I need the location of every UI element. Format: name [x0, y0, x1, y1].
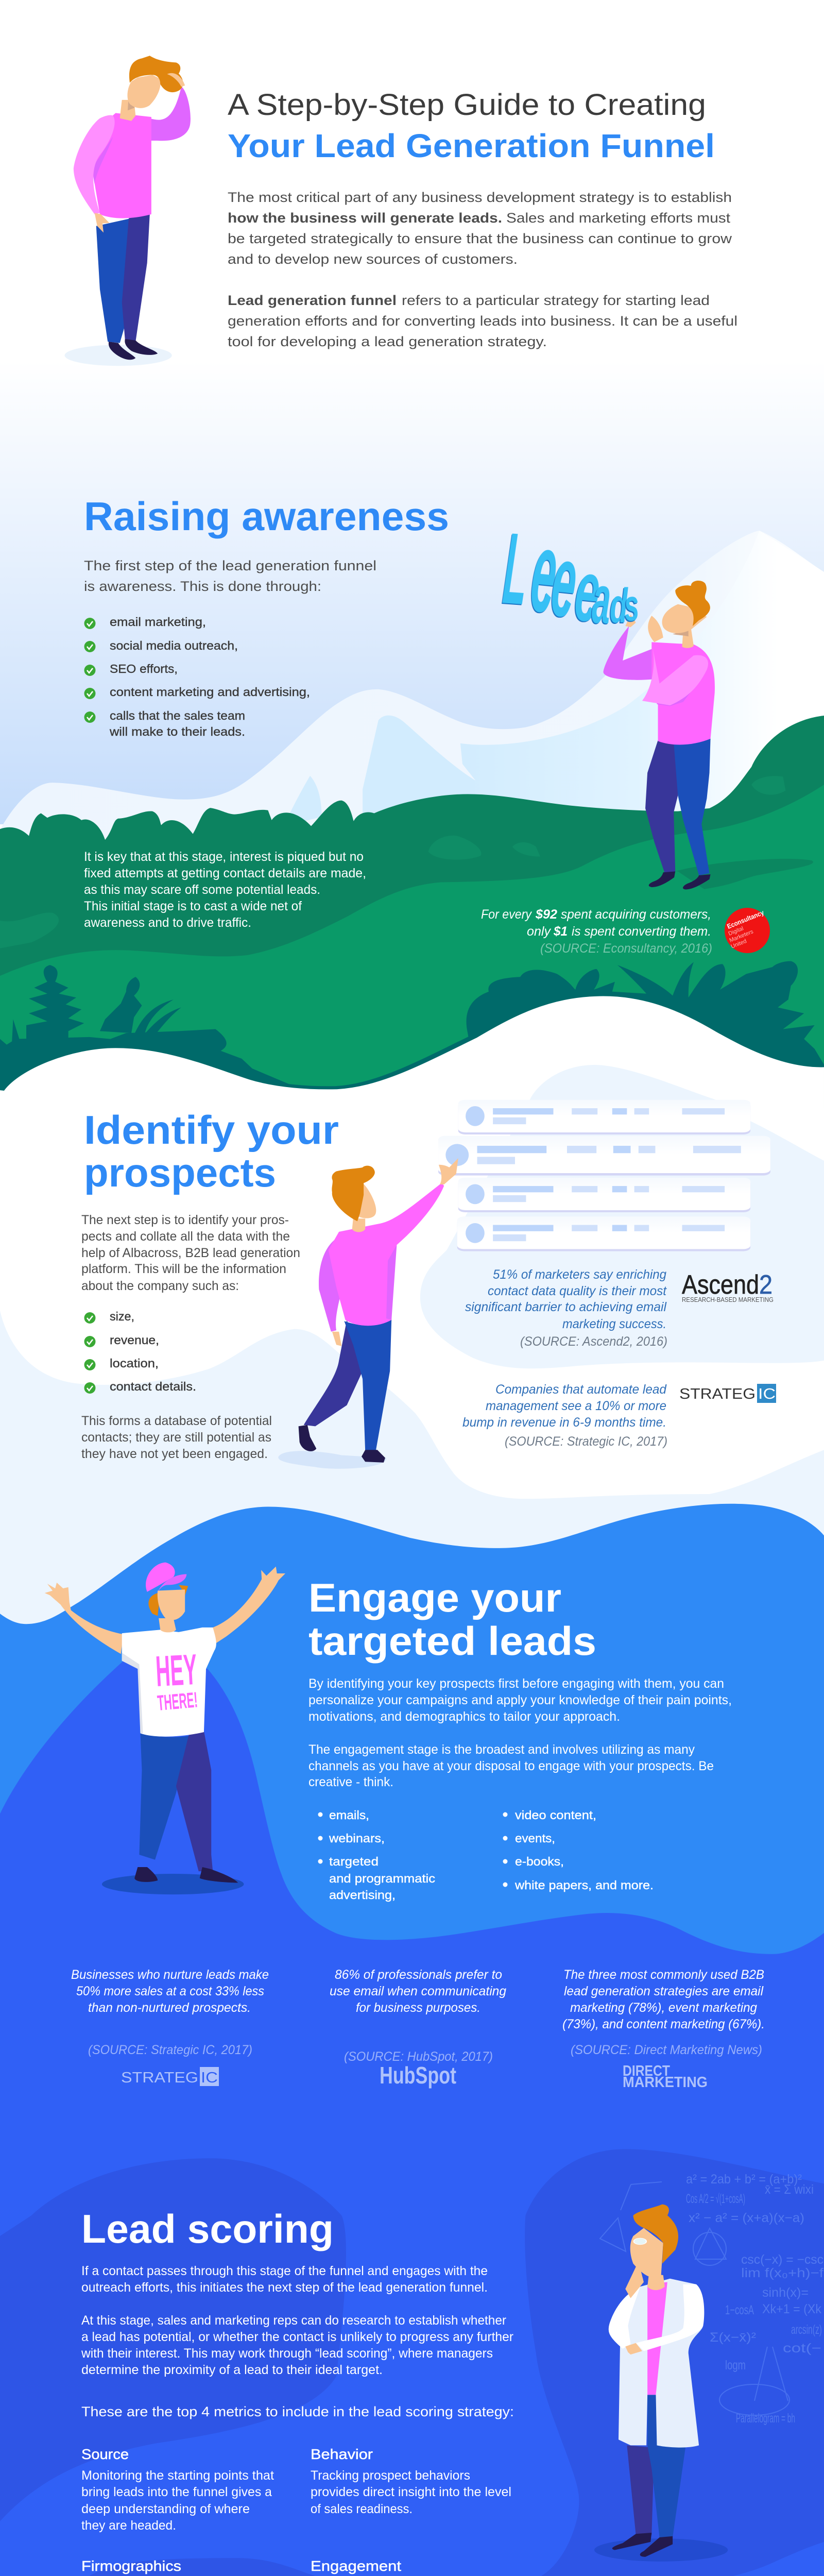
lead scoring paragraph 1: If a contact passes through this stage of the funnel and engages with the — [81, 2264, 488, 2278]
bullet list: engagement channels: white papers, and more. — [514, 1878, 654, 1892]
section background: sky gradient — [0, 361, 824, 824]
identify paragraph: The next step is to identify your pros- — [81, 1213, 289, 1227]
engage paragraph 2: channels as you have at your disposal to engage with your prospects. Be — [308, 1759, 714, 1773]
statistic: Econsultancy: spent acquiring customers, — [561, 907, 711, 922]
awareness note on green: as this may scare off some potential leads. — [84, 883, 320, 897]
statistic: Ascend2: (SOURCE: Ascend2, 2016) — [520, 1334, 667, 1349]
decoration: chalkboard formulas: csc(−x) = −csc — [741, 2252, 823, 2267]
bullet list: engagement channels: events, — [515, 1832, 555, 1845]
raising awareness intro: is awareness. This is done through: — [84, 579, 321, 594]
statistic: lead nurturing: 50% more sales at a cost 33% less — [76, 1984, 264, 1998]
statistic: Ascend2: 51% of marketers say enriching — [493, 1267, 666, 1282]
intro paragraph 1: Sales and marketing efforts must — [506, 210, 731, 226]
illustration: man shouting — [603, 581, 715, 890]
lead scoring paragraph 2: with their interest. This may work through “lead scoring”, where managers — [81, 2346, 493, 2361]
bullet list: engagement channels: targeted — [329, 1855, 379, 1868]
awareness note on green: awareness and to drive traffic. — [84, 916, 251, 930]
shouted word: Leeeads: a — [590, 562, 613, 638]
white hills edge — [0, 994, 824, 1128]
statistic: Strategic IC automation: (SOURCE: Strategic IC, 2017) — [505, 1434, 667, 1449]
logo: Econsultancy: Marketers — [729, 928, 754, 944]
awareness note on green: This initial stage is to cast a wide net of — [84, 899, 302, 913]
logo: Strategic IC: IC — [201, 2070, 218, 2086]
metric: source: bring leads into the funnel gives a — [81, 2485, 272, 2499]
statistic: Econsultancy: (SOURCE: Econsultancy, 2016) — [540, 941, 712, 956]
logo: Econsultancy: Digital — [728, 925, 744, 937]
intro paragraph 1: and to develop new sources of customers. — [228, 251, 518, 267]
card 1 — [458, 1100, 750, 1134]
checklist: channels: content marketing and advertising, — [110, 685, 310, 699]
t-shirt slogan — [154, 1645, 198, 1715]
shouted word: Leeeads: e — [526, 506, 563, 637]
statistic: B2B strategies: lead generation strategies are email — [564, 1984, 764, 1998]
identify paragraph: help of Albacross, B2B lead generation — [81, 1246, 300, 1260]
lead scoring paragraph 1 — [81, 2264, 488, 2295]
logo: Strategic IC — [679, 1384, 776, 1403]
metric: engagement: Engagement — [311, 2558, 401, 2574]
decoration: chalkboard formulas: lim f(x₀+h)−f — [741, 2266, 823, 2280]
logo: Strategic IC — [121, 2067, 219, 2086]
intro paragraph 2: generation efforts and for converting leads into business. It can be a useful — [228, 313, 737, 329]
t-shirt slogan: THERE! — [157, 1687, 198, 1715]
section background: identify blobs — [0, 1065, 824, 1713]
title: Your Lead Generation Funnel — [228, 127, 715, 164]
statistic: lead nurturing: (SOURCE: Strategic IC, 2017) — [88, 2043, 252, 2057]
decoration: chalkboard formulas: Xk+1 = (Xk — [762, 2302, 821, 2316]
checklist: channels: calls that the sales team — [110, 709, 245, 722]
logo: Direct Marketing News: DIRECT — [623, 2063, 670, 2079]
statistic: email preference — [330, 1968, 506, 2089]
decoration: chalkboard formulas: x̄ = Σ wixi — [765, 2182, 814, 2197]
raising awareness intro — [84, 558, 376, 594]
statistic: lead nurturing: Businesses who nurture leads make — [71, 1968, 269, 1982]
engage paragraph 1: motivations, and demographics to tailor your approach. — [308, 1709, 620, 1724]
decoration: chalkboard formulas: x² − a² = (x+a)(x−a) — [689, 2211, 804, 2225]
metric: source — [81, 2446, 274, 2533]
identify paragraph: platform. This will be the information — [81, 1262, 286, 1276]
illustration: man with raised arms — [45, 1563, 285, 1894]
statistic: Ascend2: marketing success. — [562, 1317, 666, 1331]
decoration: chalkboard formulas: Cos A/2 = √(1+cosA) — [686, 2192, 745, 2206]
shouted word: Leeeads: e — [547, 524, 582, 639]
statistic: Econsultancy: only — [527, 924, 551, 939]
awareness note on green: It is key that at this stage, interest is piqued but no — [84, 850, 364, 864]
metrics intro: These are the top 4 metrics to include in the lead scoring strategy: — [81, 2404, 514, 2419]
bullet list: engagement channels: emails, — [329, 1808, 369, 1822]
decoration: chalkboard formulas: Σ(x−x̄)² — [710, 2330, 756, 2345]
decoration: chalkboard formulas: logm — [725, 2358, 746, 2372]
engage paragraph 2 — [308, 1742, 714, 1789]
logo: Strategic IC: STRATEG — [679, 1386, 756, 1402]
statistic: B2B strategies: (73%), and content marketing (67%). — [562, 2017, 765, 2031]
statistic: email preference: 86% of professionals prefer to — [335, 1968, 502, 1982]
intro paragraph 1: be targeted strategically to ensure that the business can continue to grow — [228, 231, 732, 246]
metric: behavior — [311, 2446, 511, 2516]
decoration: chalkboard formulas: sinh(x)= — [762, 2285, 809, 2300]
checklist: company data — [84, 1310, 196, 1394]
metric: behavior: Tracking prospect behaviors — [311, 2468, 470, 2483]
statistic: B2B strategies: marketing (78%), event marketing — [570, 2001, 757, 2015]
panel: prospect list cards — [438, 1100, 770, 1251]
card 2 highlighted — [438, 1136, 770, 1176]
card 3 — [458, 1178, 750, 1212]
plants right — [467, 961, 824, 1064]
infographic canvas: HEY — [154, 1645, 198, 1696]
shouted word: Leeeads — [500, 506, 641, 640]
shouted word: Leeeads: d — [610, 578, 628, 633]
decoration: chalkboard formulas: a² = 2ab + b² = (a+b)² — [686, 2172, 802, 2187]
decoration: chalkboard formulas: cot(− — [783, 2341, 821, 2355]
identify closing paragraph: they have not yet been engaged. — [81, 1447, 268, 1461]
bullet list: engagement channels: video content, — [515, 1808, 596, 1822]
checklist: channels: SEO efforts, — [110, 662, 178, 675]
awareness note on green: fixed attempts at getting contact details are made, — [84, 866, 366, 880]
shouted word: Leeeads: L — [500, 511, 531, 626]
statistic: Econsultancy: For every — [481, 907, 532, 922]
metric: source: deep understanding of where — [81, 2502, 250, 2516]
statistic: Econsultancy: $92 — [535, 907, 557, 922]
heading: identify your prospects: prospects — [84, 1150, 276, 1195]
lead scoring paragraph 2: a lead has potential, or whether the contact is unlikely to progress any further — [81, 2330, 513, 2344]
illustration: man pointing at list — [278, 1158, 458, 1469]
lead scoring paragraph 2: determine the proximity of a lead to their ideal target. — [81, 2363, 383, 2377]
panel: dark blue shapes — [0, 2149, 824, 2576]
intro paragraph 2: refers to a particular strategy for starting lead — [402, 293, 710, 308]
statistic: Econsultancy: $1 — [553, 924, 568, 939]
intro paragraph 1: how the business will generate leads. — [228, 210, 502, 226]
identify paragraph — [81, 1213, 300, 1293]
checklist: company data: contact details. — [110, 1380, 196, 1393]
statistic: Strategic IC automation: bump in revenue in 6-9 months time. — [462, 1415, 666, 1430]
intro paragraph 2: tool for developing a lead generation strategy. — [228, 334, 547, 349]
checklist: company data: location, — [110, 1357, 159, 1370]
checklist: channels: social media outreach, — [110, 639, 238, 652]
engage paragraph 1 — [308, 1676, 732, 1724]
raising awareness intro: The first step of the lead generation funnel — [84, 558, 376, 573]
heading: raising awareness: Raising awareness — [84, 494, 449, 539]
metric: behavior: provides direct insight into the level — [311, 2485, 511, 2499]
logo: HubSpot: HubSpot — [380, 2062, 456, 2089]
identify paragraph: about the company such as: — [81, 1279, 239, 1293]
statistic: Ascend2 — [465, 1267, 667, 1349]
identify closing paragraph — [81, 1414, 272, 1461]
engage paragraph 1: By identifying your key prospects first before engaging with them, you can — [308, 1676, 724, 1691]
checklist: channels: email marketing, — [110, 615, 206, 629]
intro paragraph 2 — [228, 293, 737, 349]
card 4 — [457, 1216, 750, 1251]
identify closing paragraph: contacts; they are still potential as — [81, 1430, 271, 1445]
statistic: Econsultancy — [481, 907, 712, 956]
logo: Direct Marketing News — [623, 2063, 708, 2091]
statistic: Econsultancy: is spent converting them. — [572, 924, 711, 939]
statistic: Ascend2: contact data quality is their most — [488, 1284, 667, 1298]
statistic: email preference: use email when communicating — [330, 1984, 506, 1998]
checklist: channels: will make to their leads. — [109, 725, 245, 738]
metric: behavior: of sales readiness. — [311, 2502, 413, 2516]
heading: engage your targeted leads — [308, 1575, 596, 1664]
metric: behavior: Behavior — [311, 2446, 373, 2462]
statistic: lead nurturing — [71, 1968, 269, 2086]
mountains — [0, 531, 824, 872]
panel: engage light blue wave — [0, 1504, 824, 1977]
bullet list: engagement channels — [318, 1808, 654, 1902]
decoration: chalkboard formulas — [600, 2172, 823, 2426]
heading: engage your targeted leads: Engage your — [308, 1575, 561, 1620]
intro paragraph 1 — [228, 190, 732, 267]
statistic: lead nurturing: than non-nurtured prospects. — [88, 2001, 251, 2015]
checklist: company data: revenue, — [110, 1333, 159, 1347]
heading: identify your prospects — [84, 1107, 339, 1195]
decoration: chalkboard formulas: 1−cosA — [725, 2303, 754, 2317]
illustration: scientist thinking — [594, 2205, 728, 2562]
heading: identify your prospects: Identify your — [84, 1107, 339, 1153]
statistic: Strategic IC automation: Companies that automate lead — [495, 1382, 667, 1397]
metric: source: Monitoring the starting points that — [81, 2468, 274, 2483]
panel: royal blue background — [0, 1661, 824, 2576]
bullet list: engagement channels: and programmatic — [329, 1872, 435, 1885]
heading: engage your targeted leads: targeted leads — [308, 1618, 596, 1664]
statistic: email preference: (SOURCE: HubSpot, 2017) — [344, 2049, 493, 2064]
logo: Ascend2: RESEARCH-BASED MARKETING — [682, 1296, 774, 1303]
checklist: channels — [84, 615, 310, 738]
lead scoring paragraph 2 — [81, 2313, 513, 2377]
green hills — [0, 716, 824, 1108]
statistic: B2B strategies — [562, 1968, 765, 2091]
heading: lead scoring: Lead scoring — [81, 2206, 334, 2251]
plants left — [0, 965, 294, 1086]
intro paragraph 1: The most critical part of any business development strategy is to establish — [228, 190, 732, 205]
identify closing paragraph: This forms a database of potential — [81, 1414, 272, 1428]
intro paragraph 2: Lead generation funnel — [228, 293, 397, 308]
awareness note on green — [84, 850, 366, 930]
statistic: email preference: for business purposes. — [356, 2001, 480, 2015]
logo: Ascend2: Ascend — [682, 1270, 759, 1300]
bullet list: engagement channels: advertising, — [329, 1888, 396, 1902]
metric: source: they are headed. — [81, 2518, 176, 2533]
engage paragraph 2: The engagement stage is the broadest and involves utilizing as many — [308, 1742, 695, 1757]
statistic: Strategic IC automation — [462, 1382, 667, 1449]
statistic: B2B strategies: (SOURCE: Direct Marketing News) — [571, 2043, 762, 2057]
logo: Strategic IC: IC — [758, 1386, 776, 1402]
metric: source: Source — [81, 2446, 129, 2462]
statistic: Strategic IC automation: management see a 10% or more — [486, 1399, 666, 1413]
identify paragraph: pects and collate all the data with the — [81, 1229, 290, 1244]
metric: firmographics: Firmographics — [81, 2558, 181, 2574]
logo: Direct Marketing News: MARKETING — [623, 2074, 708, 2091]
statistic: Ascend2: significant barrier to achieving email — [465, 1300, 667, 1314]
bullet list: engagement channels: webinars, — [329, 1832, 385, 1845]
logo: Strategic IC: STRATEG — [121, 2070, 198, 2086]
logo: Econsultancy: Econsultancy — [726, 908, 765, 930]
engage paragraph 2: creative - think. — [308, 1775, 393, 1789]
title: A Step-by-Step Guide to Creating — [228, 88, 706, 122]
shouted word: Leeeads: s — [623, 581, 641, 630]
engage paragraph 1: personalize your campaigns and apply your knowledge of their pain points, — [308, 1693, 732, 1707]
logo: Econsultancy: United — [730, 938, 748, 950]
shouted word: Leeeads: e — [571, 542, 605, 640]
bullet list: engagement channels: e-books, — [515, 1855, 564, 1868]
title — [228, 88, 715, 164]
illustration: man scratching head — [65, 56, 191, 366]
statistic: B2B strategies: The three most commonly used B2B — [563, 1968, 764, 1982]
panel: royal blue highlight blobs — [0, 2542, 824, 2576]
logo: Econsultancy — [725, 908, 770, 953]
logo: Ascend2: 2 — [759, 1270, 772, 1300]
lead scoring paragraph 2: At this stage, sales and marketing reps can do research to establish whether — [81, 2313, 506, 2328]
lead scoring paragraph 1: outreach efforts, this initiates the next step of the lead generation funnel. — [81, 2280, 488, 2295]
checklist: company data: size, — [110, 1310, 134, 1323]
